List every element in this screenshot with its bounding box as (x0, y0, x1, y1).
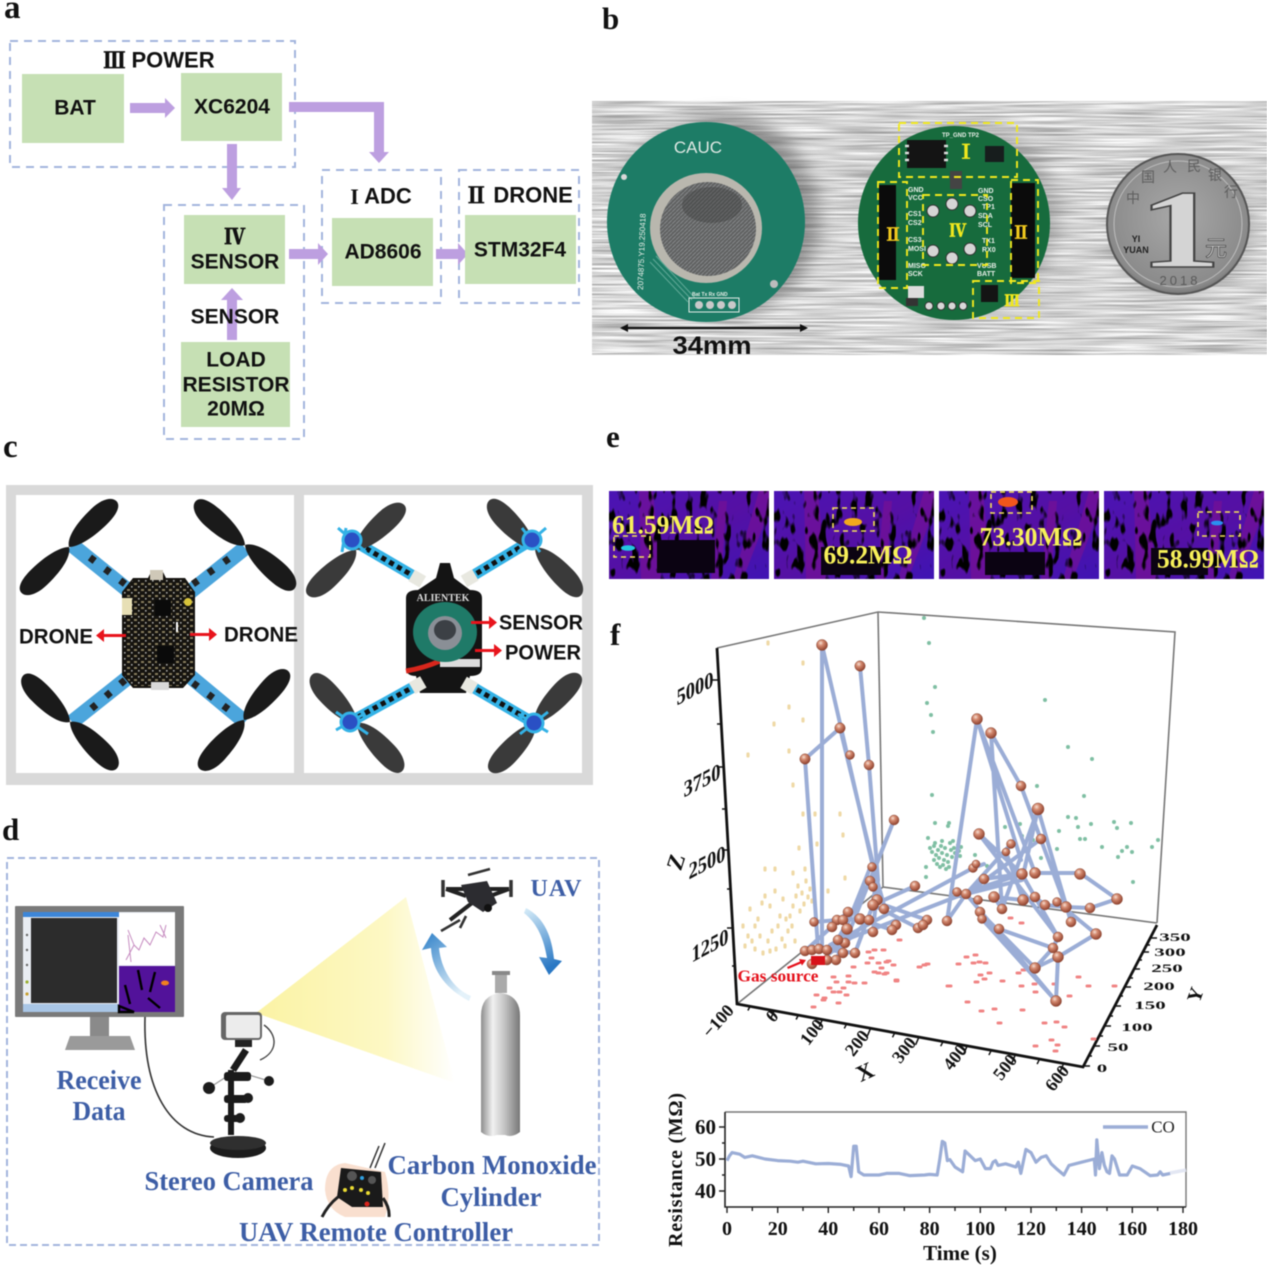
x tick labels: 120 (1016, 1218, 1046, 1240)
Y axis labels: 150 (1134, 998, 1166, 1012)
one yuan coin: 人 (1163, 159, 1177, 175)
X axis labels: 0 (762, 1006, 782, 1026)
x tick labels: 140 (1067, 1218, 1097, 1240)
label: sensor: SENSOR (499, 612, 583, 634)
strip 4 (1104, 491, 1264, 579)
legend: CO: CO (1151, 1118, 1175, 1136)
label: power: POWER (505, 642, 581, 664)
Z axis labels: 1250 (692, 922, 728, 968)
sensor board back with regions: VUSB (977, 263, 996, 270)
x tick labels: 40 (818, 1218, 838, 1240)
x tick labels: 80 (920, 1218, 940, 1240)
Y axis labels: 0 (1097, 1061, 1107, 1075)
block: BAT (22, 74, 124, 143)
strip 2: 69.2MΩ (824, 540, 912, 570)
arrow: sensor to AD8606 (289, 243, 328, 265)
label: carbon monoxide cylinder: Carbon Monoxide (388, 1150, 597, 1180)
x tick labels: 20 (768, 1218, 788, 1240)
label: UAV remote controller: UAV Remote Controller (239, 1217, 513, 1247)
flight path lines (805, 645, 1117, 1001)
sensor board back with regions: GND (908, 187, 924, 194)
Y axis labels: 300 (1154, 945, 1186, 959)
strip 2 (774, 491, 934, 579)
x tick labels: 160 (1117, 1218, 1147, 1240)
line chart: resistance vs time (665, 1093, 1198, 1265)
x tick labels: 180 (1168, 1218, 1198, 1240)
strip 4: 58.99MΩ (1157, 544, 1259, 574)
label: stereo camera: Stereo Camera (144, 1166, 314, 1196)
label: receive data: Data (72, 1096, 126, 1126)
Z axis labels: 5000 (677, 665, 713, 711)
sensor board front: CAUC (674, 138, 722, 157)
Y axis labels: 250 (1151, 961, 1183, 975)
flight path sphere markers (800, 640, 1122, 1006)
legend: CO (1103, 1118, 1175, 1136)
Z axis labels: Z (662, 851, 690, 873)
curved arrow: up to UAV (422, 933, 471, 1001)
sensor board back with regions: CS1 (908, 211, 922, 218)
scatter: yellow wall projection (743, 642, 845, 954)
drone with flight controller (13, 492, 302, 777)
3D box frame (712, 612, 1175, 1072)
label: carbon monoxide cylinder: Cylinder (440, 1182, 542, 1212)
sensor board back with regions: TX1 (982, 238, 995, 245)
curved arrow: down to cylinder (524, 908, 562, 975)
label: receive data: Receive (56, 1065, 142, 1095)
x tick labels: 60 (869, 1218, 889, 1240)
Z axis labels (662, 665, 728, 968)
light cone (256, 897, 455, 1083)
sensor board back with regions: CSO (978, 196, 994, 203)
block: BAT: BAT (54, 96, 96, 120)
block: load resistor: 20MΩ (207, 398, 265, 420)
Z axis labels: 2500 (689, 839, 725, 885)
x tick labels: 0 (722, 1218, 732, 1240)
label: carbon monoxide cylinder (388, 1150, 597, 1212)
one yuan coin: 2018 (1160, 273, 1200, 288)
panel a: circuit block diagram (10, 41, 579, 439)
arrow: BAT to XC6204 (130, 98, 175, 118)
sensor board back with regions: MISO (908, 263, 926, 270)
label: UAV: UAV (530, 876, 582, 902)
panel f: 3D flight path chart (662, 612, 1209, 1095)
one yuan coin: 元 (1205, 236, 1227, 261)
sensor board front: 2074875.Y19.250418 (636, 213, 648, 290)
panel c: drone photos frame (6, 485, 593, 785)
scale bar 34mm (620, 324, 808, 360)
block: IV sensor (184, 215, 285, 284)
X axis labels: 400 (939, 1040, 971, 1074)
sensor board back with regions: Ⅱ (1012, 224, 1030, 242)
X axis labels: 500 (989, 1050, 1021, 1084)
one yuan coin: 中 (1126, 190, 1140, 206)
y tick labels (695, 1115, 716, 1203)
arrow: AD8606 to STM32F4 (436, 243, 468, 265)
sensor board back with regions: Ⅲ (1004, 294, 1020, 310)
label: drone right: DRONE (224, 624, 298, 646)
X axis labels: 200 (841, 1026, 873, 1060)
sensor board back with regions: CS3 (908, 237, 922, 244)
drone with sensor board (300, 492, 589, 779)
y axis title: Resistance (MΩ) (665, 1093, 687, 1247)
one yuan coin: 行 (1224, 184, 1238, 200)
label: drone left: DRONE (19, 626, 93, 648)
label: sensor: SENSOR (191, 306, 279, 328)
X axis labels: 300 (888, 1033, 920, 1067)
sensor board back with regions: RX0 (982, 247, 996, 254)
arrow: load resistor to sensor (221, 288, 243, 340)
strip 3: 73.30MΩ (980, 522, 1082, 552)
strip 1: 61.59MΩ (612, 510, 714, 540)
Y axis labels: 50 (1108, 1040, 1128, 1054)
one yuan coin: 国 (1141, 169, 1155, 185)
sensor board front: Bat Tx Rx GND (692, 292, 728, 298)
stereo camera on tripod (203, 1012, 274, 1158)
one yuan coin: 银 (1208, 167, 1222, 183)
block: XC6204 (181, 73, 282, 141)
sensor board back with regions: CS2 (908, 220, 922, 227)
sensor board back with regions: MOSI (908, 246, 926, 253)
monitor (15, 906, 184, 1050)
x tick labels: 100 (965, 1218, 995, 1240)
arrow: XC6204 to sensor (222, 144, 241, 200)
sensor board back with regions: SCK (908, 271, 923, 278)
sensor board back with regions: GND (978, 188, 994, 195)
heading: II drone: Ⅱ DRONE (465, 182, 573, 208)
X axis labels: 100 (796, 1015, 828, 1049)
X axis labels (698, 1000, 1073, 1095)
heading: III power: Ⅲ POWER (103, 48, 215, 72)
sensor board back with regions: VCC (908, 195, 923, 202)
block: AD8606 (332, 218, 433, 286)
sensor board back with regions (858, 122, 1059, 320)
red pointer arrows (96, 616, 502, 657)
strip 1 (609, 491, 769, 579)
one yuan coin (1107, 154, 1253, 298)
scale bar 34mm: 34mm (672, 332, 752, 360)
block: STM32F4: STM32F4 (474, 238, 566, 262)
heading: I ADC: I ADC (350, 184, 412, 208)
block: load resistor: RESISTOR (183, 374, 289, 396)
X axis labels: X (852, 1057, 878, 1087)
Y axis labels: 100 (1121, 1020, 1153, 1034)
scatter: green wall projection (924, 618, 1158, 882)
panel d: experiment setup (7, 858, 599, 1247)
sensor board back with regions: Ⅰ (956, 142, 976, 164)
label: receive data (56, 1065, 142, 1126)
remote controller with hands (322, 1143, 389, 1217)
panel b: photo of sensor boards and coin (592, 101, 1267, 360)
scatter: red floor projection (812, 918, 1116, 1051)
Z axis labels: 3750 (684, 757, 720, 803)
sensor board back with regions: BATT (977, 271, 996, 278)
sensor board back with regions: TP_GND TP2 (942, 133, 980, 139)
panel letter f: f (610, 617, 621, 652)
block: IV sensor: Ⅳ (224, 225, 246, 249)
block: load resistor: LOAD (206, 348, 266, 372)
Y axis labels: 350 (1159, 930, 1191, 944)
X axis labels: 600 (1041, 1061, 1073, 1095)
block: IV sensor: SENSOR (191, 250, 279, 274)
block: STM32F4 (465, 215, 576, 284)
gas source marker and arrow: Gas source (738, 966, 818, 986)
Y axis labels (1097, 930, 1209, 1075)
sensor board back with regions: TP1 (982, 204, 995, 211)
sensor board back with regions: Ⅱ (884, 226, 902, 244)
gas cylinder (481, 971, 520, 1136)
UAV icon (441, 869, 511, 931)
Y axis labels: 200 (1143, 979, 1175, 993)
y tick labels: 50 (695, 1147, 716, 1171)
x axis title: Time (s) (923, 1241, 997, 1265)
cable (145, 1017, 214, 1137)
sensor board back with regions: SCL (978, 222, 993, 229)
one yuan coin: 民 (1187, 158, 1201, 174)
arrow: XC6204 to ADC (289, 102, 389, 163)
data line: CO (727, 1140, 1170, 1177)
sensor board back with regions: Ⅳ (950, 222, 966, 240)
strip 3 (939, 491, 1099, 579)
X axis labels: −100 (698, 1000, 738, 1042)
one yuan coin: YUAN (1123, 245, 1149, 255)
region outlines (878, 123, 1039, 318)
sensor board back with regions: SDA (978, 213, 993, 220)
one yuan coin: 1 (1138, 167, 1222, 291)
drone with sensor board: ALIENTEK (417, 593, 470, 604)
block: XC6204: XC6204 (194, 96, 270, 118)
panel letter d: d (2, 812, 19, 847)
y tick labels: 60 (695, 1115, 716, 1139)
x tick labels (722, 1218, 1198, 1240)
panel e: thermal-style strip images (609, 491, 1264, 579)
sensor board front (607, 116, 820, 322)
panel letter b: b (602, 1, 619, 36)
block: load resistor (181, 342, 290, 427)
panel letter c: c (3, 429, 18, 465)
one yuan coin: YI (1132, 234, 1140, 244)
panel letter e: e (606, 419, 620, 454)
y tick labels: 40 (695, 1179, 716, 1203)
block: AD8606: AD8606 (344, 240, 422, 264)
gas source marker and arrow (738, 956, 825, 986)
Y axis labels: Y (1183, 984, 1209, 1006)
